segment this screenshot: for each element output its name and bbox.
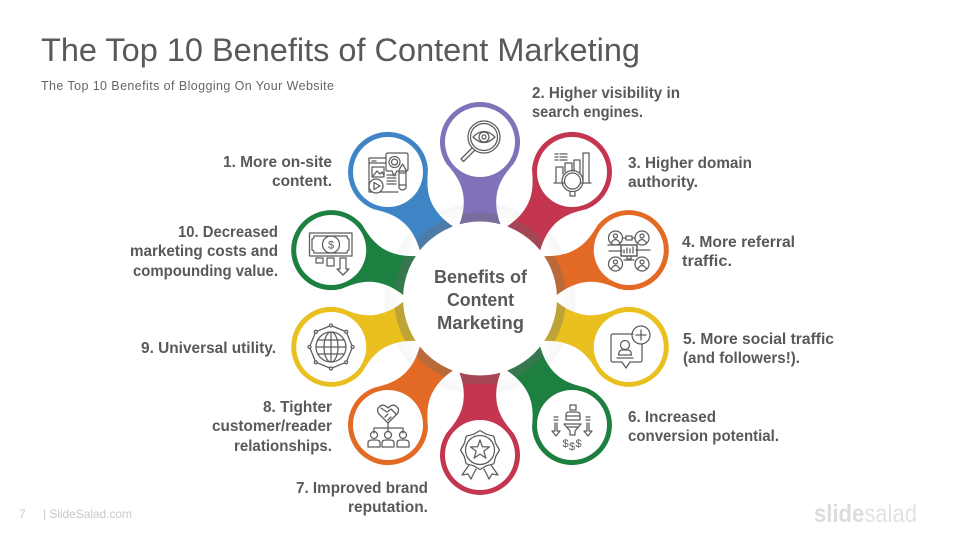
label 6 bbox=[628, 409, 779, 445]
label 10: compounding value. bbox=[133, 263, 278, 280]
icon: magnifier with eye bbox=[461, 121, 500, 162]
label 9: 9. Universal utility. bbox=[141, 340, 276, 357]
label 10: marketing costs and bbox=[130, 243, 278, 260]
label 8: 8. Tighter bbox=[263, 399, 332, 416]
petal 3: red, domain authority bbox=[490, 116, 628, 264]
icon: funnel with dollars: $ bbox=[562, 438, 569, 450]
label 1: 1. More on-site bbox=[223, 154, 332, 171]
label 1: content. bbox=[272, 173, 332, 190]
label 10 bbox=[130, 224, 278, 280]
label 8: customer/reader bbox=[212, 418, 332, 435]
icon: globe in octagon bbox=[308, 324, 354, 370]
center heading: Marketing bbox=[437, 312, 524, 333]
background halo ring bbox=[384, 202, 576, 394]
icon: connected people network bbox=[608, 231, 650, 271]
label 8: relationships. bbox=[234, 438, 332, 455]
label 3: 3. Higher domain bbox=[628, 155, 752, 172]
petal 9: yellow, universal utility bbox=[281, 283, 424, 397]
icon: funnel with dollars bbox=[552, 405, 592, 453]
icon: banknote with down arrow bbox=[310, 233, 352, 275]
label 7 bbox=[296, 480, 428, 516]
label 5 bbox=[683, 331, 834, 367]
title: The Top 10 Benefits of Content Marketing bbox=[41, 32, 640, 68]
icon: funnel with dollars: $ bbox=[569, 441, 575, 453]
darker band at petal bases bbox=[394, 212, 566, 384]
petal 8: orange, customer relationships bbox=[332, 333, 470, 481]
petal 4: orange, referral traffic bbox=[536, 200, 679, 314]
petal 2: purple, search visibility bbox=[440, 102, 520, 226]
label 8 bbox=[212, 399, 332, 455]
label 2: 2. Higher visibility in bbox=[532, 85, 680, 102]
icon: handshake heart with people bbox=[368, 405, 409, 447]
icon: funnel with dollars: $ bbox=[576, 438, 582, 450]
label 3 bbox=[628, 155, 752, 191]
center heading bbox=[434, 266, 528, 333]
icon: content media bbox=[369, 153, 408, 193]
label 7: 7. Improved brand bbox=[296, 480, 428, 497]
icon: banknote with down arrow: $ bbox=[328, 240, 334, 252]
logo wordmark: slidesalad bbox=[814, 500, 917, 528]
label 2: search engines. bbox=[532, 104, 643, 121]
icon: bar chart with magnifier bbox=[554, 153, 591, 196]
label 6: 6. Increased bbox=[628, 409, 716, 426]
label 2 bbox=[532, 85, 680, 121]
petal 1: blue, on-site content bbox=[332, 116, 470, 264]
center heading: Benefits of bbox=[434, 266, 528, 287]
label 4: 4. More referral bbox=[682, 234, 795, 251]
label 1 bbox=[223, 154, 332, 190]
center heading: Content bbox=[447, 289, 514, 310]
label 3: authority. bbox=[628, 174, 698, 191]
label 4: traffic. bbox=[682, 253, 732, 270]
center circle bbox=[403, 222, 557, 376]
label 10: 10. Decreased bbox=[178, 224, 278, 241]
footer site name: | SlideSalad.com bbox=[43, 507, 132, 521]
label 6: conversion potential. bbox=[628, 428, 779, 445]
icon: profile with plus bbox=[611, 326, 650, 368]
petal 10: green, decreased costs bbox=[281, 200, 424, 314]
petal 7: red, brand reputation bbox=[440, 370, 520, 495]
icon: award badge with star bbox=[460, 430, 500, 479]
footer page number: 7 bbox=[19, 507, 26, 521]
petal 5: yellow, social traffic bbox=[536, 283, 679, 397]
label 7: reputation. bbox=[348, 499, 428, 516]
label 5: 5. More social traffic bbox=[683, 331, 834, 348]
subtitle: The Top 10 Benefits of Blogging On Your Website bbox=[41, 79, 334, 93]
label 5: (and followers!). bbox=[683, 350, 800, 367]
label 4 bbox=[682, 234, 795, 270]
petal 6: green, conversion potential bbox=[490, 333, 628, 481]
